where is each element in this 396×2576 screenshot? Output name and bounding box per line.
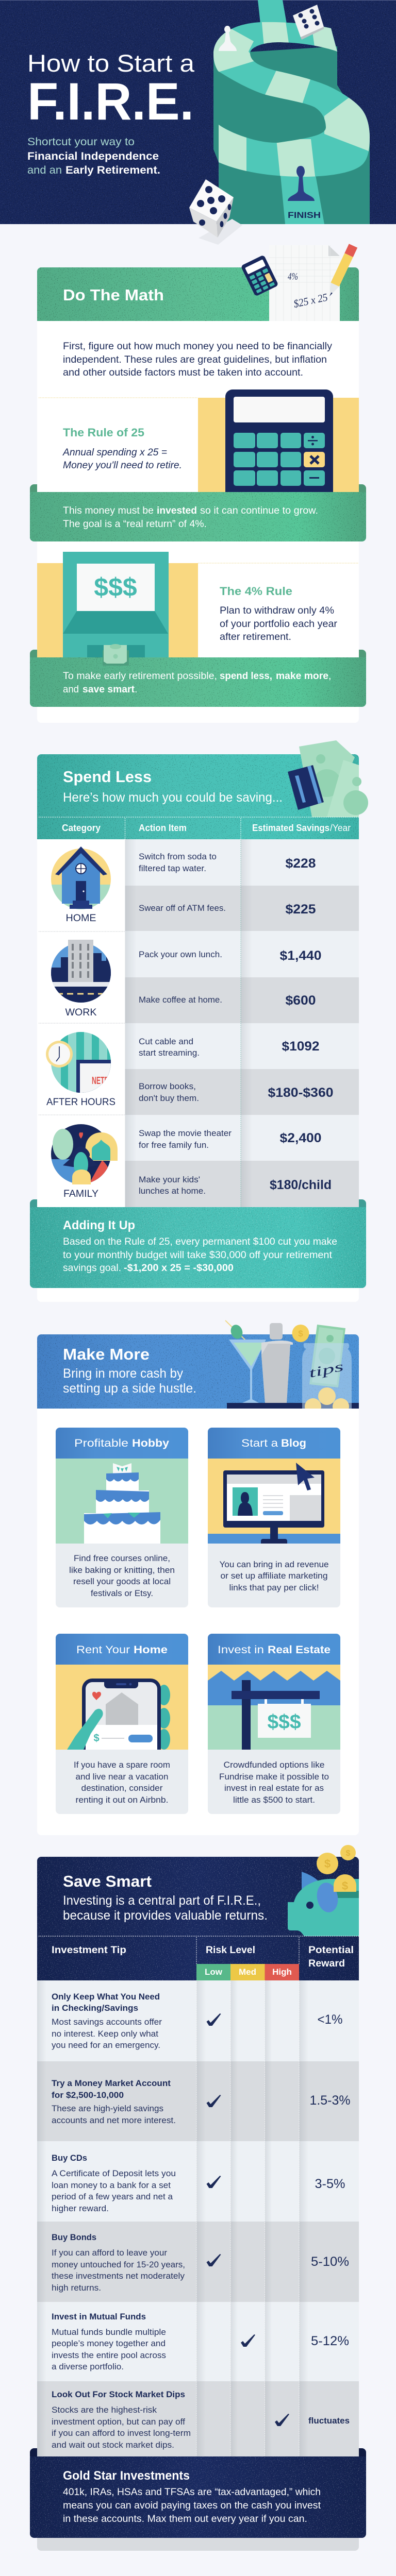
title: F.I.R.E. [27, 72, 194, 131]
header band [37, 1857, 359, 1980]
callout: invest: This money must be [63, 505, 154, 516]
4% rule text: Plan to withdraw only 4% [220, 605, 334, 616]
row: checking and savings: in Checking/Savings [52, 2004, 138, 2013]
header band: setting up a side hustle. [63, 1381, 196, 1396]
rule of 25 text: Money you'll need to retire. [63, 460, 182, 471]
row: lunch: Pack your own lunch. [139, 950, 222, 959]
row: bonds: Buy Bonds [52, 2233, 96, 2242]
row: books: Borrow books, [139, 1082, 196, 1091]
row: stock market dips: if you can afford to invest long-term [52, 2429, 191, 2438]
subtitle: Financial Independence [27, 150, 159, 162]
row: bonds: high returns. [52, 2283, 101, 2293]
table header: Potential [308, 1944, 354, 1956]
row: mutual funds [52, 2312, 349, 2371]
callout: adding it up: to your monthly budget will take $30,000 off your retirement [63, 1249, 333, 1261]
icon: computer [208, 1459, 340, 1544]
icon: paper with sums [269, 245, 340, 321]
finish label: FINISH [288, 210, 321, 220]
row: CDs: A Certificate of Deposit lets you [52, 2169, 176, 2178]
callout: gold star investments: Gold Star Investments [63, 2469, 190, 2483]
label: WORK [65, 1007, 97, 1018]
row: stock market dips: Stocks are the highest-risk [52, 2405, 157, 2415]
callout: spend less make more save smart: , [328, 670, 331, 682]
row: lunch [139, 948, 322, 963]
icon: small calculator [241, 255, 278, 297]
panel: do the math [30, 244, 366, 723]
row: kids lunches [139, 1175, 332, 1196]
row: CDs: period of a few years and net a [52, 2192, 173, 2201]
icon: piggy bank with coins: $ [324, 1857, 331, 1870]
callout: spend less make more save smart [30, 644, 366, 707]
icon: after hours [46, 1032, 116, 1108]
icon: tip jar: tips [307, 1359, 345, 1381]
icon: cake [56, 1459, 188, 1544]
header band [37, 267, 359, 321]
icon: bottom die [189, 179, 242, 245]
icon: piggy bank with coins: $ [346, 1849, 351, 1858]
row: money market [52, 2079, 351, 2125]
row: checking and savings: Only Keep What You Need [52, 1992, 160, 2002]
table header [52, 1944, 354, 1969]
row: stock market dips: investment option, but can pay off [52, 2417, 185, 2427]
card: start a blog [208, 1428, 340, 1607]
row: mutual funds: people’s money together and [52, 2339, 166, 2348]
row: coffee: Make coffee at home. [139, 995, 222, 1005]
icon: after hours: NETF [92, 1075, 108, 1087]
callout: adding it up: -$1,200 x 25 = -$30,000 [124, 1262, 234, 1274]
label: HOME [66, 913, 96, 924]
card: rent your home: If you have a spare room [74, 1760, 170, 1770]
icon: piggy bank with coins: $ [342, 1879, 348, 1892]
label: AFTER HOURS [46, 1097, 116, 1108]
subtitle: and an [27, 164, 62, 176]
icon: work [51, 940, 111, 1018]
illustration: bar tips [225, 1320, 359, 1415]
row: mutual funds: Invest in Mutual Funds [52, 2312, 146, 2321]
label: FAMILY [63, 1189, 98, 1199]
callout: invest: so it can continue to grow. [200, 505, 318, 516]
row: money market: for $2,500-10,000 [52, 2091, 124, 2100]
heading: Save Smart [63, 1872, 152, 1890]
row: CDs [52, 2154, 345, 2213]
icon: martini [225, 1320, 266, 1403]
card: start a blog: Start a [241, 1437, 278, 1449]
row: coffee: $600 [286, 993, 316, 1008]
icon: for sale sign: $$$ [267, 1711, 301, 1733]
row: books: $180-$360 [268, 1086, 333, 1100]
card: start a blog: Blog [281, 1437, 306, 1449]
row: soda: filtered tap water. [139, 864, 206, 873]
subtitle [27, 136, 160, 176]
row: cable: Cut cable and [139, 1037, 193, 1046]
card: invest in real estate: Crowdfunded options like [224, 1760, 325, 1770]
icon: credit card [288, 765, 324, 810]
panel: make more [37, 1320, 359, 1835]
header band [37, 754, 359, 839]
icon: home [51, 846, 111, 924]
row: ATM fees: $225 [286, 902, 316, 917]
subtitle: Shortcut your way to [27, 136, 135, 148]
table header: Action Item [139, 823, 187, 833]
table rows [39, 839, 359, 1207]
board game dollar sign [209, 0, 374, 224]
risk legend: Low [205, 1967, 223, 1977]
row: kids lunches: $180/child [270, 1178, 332, 1192]
card: invest in real estate: Fundrise make it possible to [219, 1772, 329, 1782]
card: rent your home: renting it out on Airbnb. [75, 1795, 168, 1805]
card: profitable hobby: like baking or knitting, then [69, 1566, 175, 1575]
panel: save smart [30, 1845, 366, 2551]
callout: spend less make more save smart: make more [276, 670, 328, 682]
icon: piggy bank with coins [288, 1845, 361, 1936]
row: checking and savings: Most savings accounts offer [52, 2018, 162, 2027]
4% rule text: The 4% Rule [220, 585, 292, 598]
risk legend: High [272, 1967, 292, 1977]
callout: gold star investments [30, 2448, 366, 2538]
icon: blue pawn [288, 166, 315, 201]
icon: family [51, 1124, 118, 1199]
icon: white pawn [219, 26, 237, 51]
callout: spend less make more save smart: To make early retirement possible, [63, 670, 217, 682]
card: invest in real estate: Invest in [218, 1644, 264, 1656]
callout: invest: invested [157, 505, 197, 516]
row: money market: 1.5-3% [309, 2093, 351, 2108]
header band [37, 1334, 359, 1409]
intro text: independent. These rules are great guidelines, but inflation [63, 354, 327, 365]
callout: spend less make more save smart: . [135, 684, 137, 695]
card: rent your home: Home [134, 1644, 168, 1656]
callout: spend less make more save smart: and [63, 684, 79, 695]
row: soda: $228 [286, 856, 316, 871]
row: bonds [52, 2233, 349, 2293]
row: kids lunches: lunches at home. [139, 1187, 206, 1196]
rule of 25 text: Annual spending x 25 = [62, 447, 167, 458]
icon: tip jar [302, 1325, 352, 1415]
callout: adding it up: Adding It Up [63, 1218, 135, 1232]
icon: paper with sums: 4% [288, 271, 298, 282]
heading: Do The Math [63, 286, 164, 304]
row: mutual funds: invests the entire pool across [52, 2351, 166, 2360]
card: profitable hobby: festivals or Etsy. [91, 1589, 153, 1598]
subheading: Here’s how much you could be saving... [63, 790, 283, 805]
row: ATM fees: Swear off of ATM fees. [139, 904, 226, 913]
icon: top die [293, 5, 324, 40]
panel: spend less [30, 740, 368, 1302]
card: profitable hobby: resell your goods at local [73, 1577, 171, 1586]
card: profitable hobby: Find free courses online, [74, 1554, 170, 1563]
card: rent your home: and live near a vacation [75, 1772, 168, 1782]
header band: because it provides valuable returns. [63, 1908, 268, 1923]
card: profitable hobby [56, 1428, 188, 1607]
icon: banknote from ATM [103, 644, 129, 666]
row: stock market dips: Look Out For Stock Market Dips [52, 2390, 185, 2399]
subtitle: Early Retirement. [65, 164, 160, 176]
risk legend [196, 1964, 299, 1980]
icon: pencil [329, 244, 357, 296]
card: invest in real estate [208, 1634, 340, 1814]
row: soda: Switch from soda to [139, 852, 217, 861]
card: start a blog: or set up affiliate marketing [221, 1571, 328, 1581]
icon: for sale sign [208, 1665, 340, 1750]
table header: Category [62, 823, 101, 833]
row: stock market dips: and wait out stock market dips. [52, 2441, 174, 2450]
4% rule illustration: ATM [37, 552, 198, 657]
icon: coin: $ [298, 1329, 303, 1338]
table header [62, 823, 351, 833]
card: invest in real estate: invest in real estate for as [224, 1784, 324, 1793]
row: bonds: If you can afford to leave your [52, 2248, 168, 2258]
callout: gold star investments: 401k, IRAs, HSAs and TFSAs are “tax-advantaged,” which [63, 2486, 321, 2498]
row: mutual funds: 5-12% [311, 2334, 349, 2348]
row: ATM fees [139, 902, 316, 917]
row: money market: These are high-yield savings [52, 2104, 163, 2113]
card: start a blog: links that pay per click! [229, 1583, 319, 1592]
row: CDs: 3-5% [315, 2177, 345, 2191]
card: invest in real estate: little as $500 to start. [233, 1795, 315, 1805]
subheading: Investing is a central part of F.I.R.E., [63, 1893, 261, 1908]
4% rule text: of your portfolio each year [220, 618, 338, 630]
callout: spend less make more save smart: spend less, [220, 670, 272, 682]
row: movie: $2,400 [279, 1131, 322, 1145]
callout: gold star investments: in these accounts. Max them out every year if you can. [63, 2513, 307, 2524]
row: mutual funds: a diverse portfolio. [52, 2362, 124, 2371]
row: movie [139, 1129, 322, 1150]
rule of 25 text: The Rule of 25 [63, 426, 144, 439]
row: stock market dips [52, 2390, 350, 2450]
row: kids lunches: Make your kids' [139, 1175, 200, 1184]
card: rent your home: destination, consider [81, 1784, 163, 1793]
callout: spend less make more save smart: save smart [82, 684, 135, 695]
card: rent your home: Rent Your [76, 1644, 130, 1656]
row: cable: $1092 [282, 1039, 320, 1054]
table header: Investment Tip [52, 1944, 126, 1956]
rule of 25 text [62, 426, 182, 471]
row: checking and savings: <1% [318, 2012, 342, 2027]
callout: adding it up: savings goal. [63, 1262, 121, 1274]
row: movie: Swap the movie theater [139, 1129, 232, 1138]
card: invest in real estate: Real Estate [268, 1644, 331, 1656]
icon: phone [56, 1665, 188, 1750]
callout: adding it up: Based on the Rule of 25, every permanent $100 cut you make [63, 1236, 337, 1247]
4% rule text: after retirement. [220, 631, 291, 642]
row: CDs: Buy CDs [52, 2154, 87, 2163]
row: bonds: these investments net moderately [52, 2272, 185, 2281]
row: coffee [139, 993, 316, 1008]
row: checking and savings [52, 1992, 342, 2050]
risk legend: Med [239, 1967, 256, 1977]
intro text: and other outside factors must be taken into account. [63, 367, 303, 378]
4% rule text [220, 585, 338, 642]
table header: Risk Level [206, 1944, 255, 1956]
row: money market: Try a Money Market Account [52, 2079, 171, 2088]
4% rule illustration: ATM: $$$ [94, 573, 137, 602]
callout: adding it up [30, 1199, 366, 1288]
hero banner [0, 0, 396, 224]
subheading: Bring in more cash by [63, 1366, 183, 1381]
icon: paper with sums: $25 x 25 [292, 291, 329, 310]
icon: coin [292, 1325, 309, 1342]
row: CDs: higher reward. [52, 2204, 109, 2213]
intro text [63, 341, 332, 378]
row: bonds: money untouched for 15-20 years, [52, 2260, 185, 2269]
card: rent your home [56, 1634, 188, 1814]
callout: gold star investments: means you can avoid paying taxes on the cash you invest [63, 2500, 321, 2511]
row: cable: start streaming. [139, 1048, 200, 1058]
callout: invest: The goal is a “real return” of 4%. [63, 518, 207, 530]
investment table rows [37, 1980, 359, 2456]
icon: phone: $ [93, 1733, 100, 1744]
icon: banknotes [299, 740, 368, 817]
row: books: don't buy them. [139, 1094, 199, 1103]
table header: Reward [308, 1958, 345, 1969]
row: movie: for free family fun. [139, 1141, 209, 1150]
table header: /Year [330, 823, 351, 833]
row: checking and savings: no interest. Keep only what [52, 2029, 158, 2039]
heading: Spend Less [63, 768, 152, 786]
intro text: First, figure out how much money you need to be financially [63, 341, 332, 352]
row: soda [139, 852, 316, 873]
row: money market: accounts and net more interest. [52, 2116, 176, 2125]
row: cable [139, 1037, 320, 1058]
heading: Make More [63, 1345, 150, 1363]
row: stock market dips: fluctuates [308, 2416, 350, 2426]
row: CDs: loan money to a bank for a set [52, 2181, 171, 2190]
title: How to Start a [27, 49, 195, 77]
table header: Estimated Savings [252, 823, 329, 833]
row: mutual funds: Mutual funds bundle multiple [52, 2328, 166, 2337]
rule of 25 illustration: calculator [198, 389, 359, 492]
icon: shaker [261, 1323, 293, 1403]
card: profitable hobby: Profitable [74, 1437, 128, 1449]
card: start a blog: You can bring in ad revenue [220, 1560, 329, 1569]
row: checking and savings: you need for an emergency. [52, 2041, 160, 2050]
row: books [139, 1082, 333, 1103]
callout: invest [30, 484, 366, 541]
card: profitable hobby: Hobby [132, 1437, 169, 1449]
row: bonds: 5-10% [311, 2255, 349, 2269]
row: lunch: $1,440 [279, 948, 322, 963]
